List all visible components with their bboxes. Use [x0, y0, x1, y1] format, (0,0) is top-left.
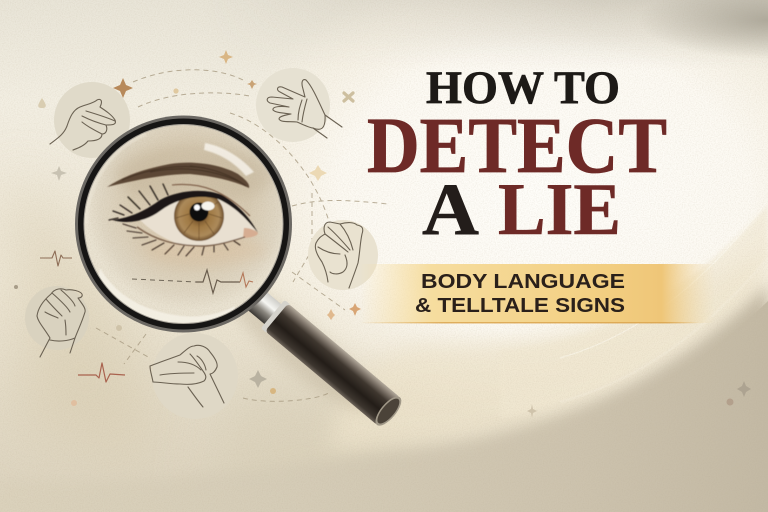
eye white [140, 195, 258, 245]
glass reflections [204, 143, 254, 176]
title line: a: A [422, 169, 479, 251]
handle [213, 270, 406, 430]
iris [174, 191, 224, 241]
title line: lie: LIE [498, 169, 621, 251]
lens with eye [84, 125, 282, 323]
title line: detect: DETECT [367, 103, 667, 190]
title [367, 62, 667, 251]
icon: open hand, upper left [50, 82, 130, 158]
lens ring [75, 116, 292, 332]
lower lid and lashes [137, 227, 245, 246]
subtitle line 1: BODY LANGUAGE [421, 271, 625, 293]
subtitle line 2: & TELLTALE SIGNS [415, 295, 625, 317]
pupil and highlights [190, 202, 208, 222]
icon: raised fist, right [308, 220, 378, 290]
dashed connector lines [96, 70, 388, 401]
icon: open palm, upper right [256, 68, 342, 142]
title line: how to: HOW TO [426, 62, 620, 114]
subtitle banner [360, 264, 715, 324]
icon: clenched fist, lower left [25, 286, 89, 357]
eyebrow [107, 163, 249, 188]
pulse lines [40, 251, 125, 382]
pulse inside lens [132, 279, 196, 282]
icon: pinching hand, bottom [150, 333, 238, 419]
hand circles and line drawings [25, 68, 378, 419]
upper lid and lashes [112, 191, 258, 233]
sparkles and dots [14, 50, 751, 418]
magnifying glass [75, 116, 406, 430]
